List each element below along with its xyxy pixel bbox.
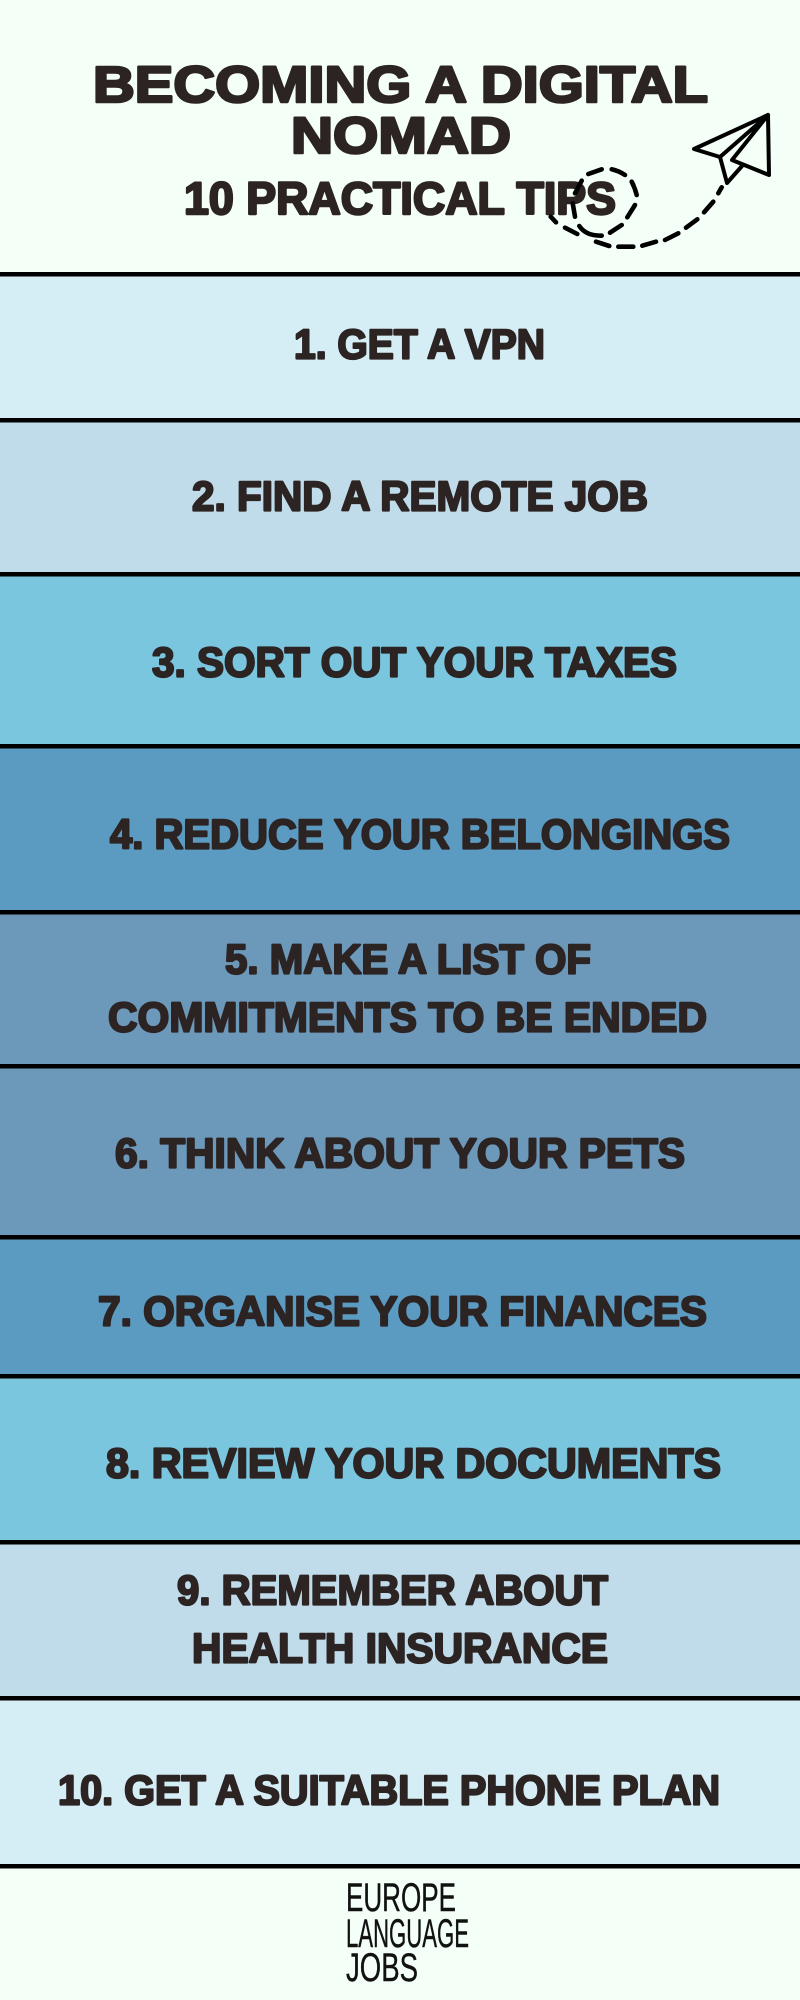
icon: paper plane (694, 115, 769, 183)
tip 5 text: COMMITMENTS TO BE ENDED (108, 994, 707, 1040)
panel: tip 10 (0, 1698, 800, 1866)
title: BECOMING A DIGITAL (93, 56, 708, 113)
subtitle: 10 PRACTICAL TIPS (184, 173, 616, 224)
dashed flight path (551, 169, 722, 247)
logo: Europe Language Jobs: LANGUAGE (346, 1912, 469, 1956)
panel: header (93, 56, 769, 247)
panel: tip 2 (0, 420, 800, 574)
tip 7 text: 7. ORGANISE YOUR FINANCES (98, 1288, 707, 1334)
logo: Europe Language Jobs: JOBS (346, 1946, 418, 1990)
tip 3 text: 3. SORT OUT YOUR TAXES (152, 638, 677, 686)
logo: Europe Language Jobs: EUROPE (346, 1876, 456, 1920)
panel: tip 3 (0, 574, 800, 746)
tip 4 text: 4. REDUCE YOUR BELONGINGS (110, 810, 730, 858)
panel: tip 4 (0, 746, 800, 912)
panel: tip 6 (0, 1066, 800, 1237)
panel: tip 1 (0, 274, 800, 420)
tip 2 text: 2. FIND A REMOTE JOB (192, 472, 648, 520)
tip 9 text (177, 1566, 608, 1672)
title (93, 56, 708, 164)
tip 5 text: 5. MAKE A LIST OF (225, 936, 591, 982)
tip 1 text: 1. GET A VPN (294, 320, 545, 368)
tip 6 text: 6. THINK ABOUT YOUR PETS (115, 1130, 685, 1176)
panel: tip 5 (0, 912, 800, 1066)
tip 10 text: 10. GET A SUITABLE PHONE PLAN (58, 1766, 720, 1814)
panel: tip 7 (0, 1237, 800, 1376)
tip 8 text: 8. REVIEW YOUR DOCUMENTS (106, 1440, 721, 1486)
tip 5 text (108, 936, 707, 1040)
logo: Europe Language Jobs (346, 1876, 469, 1990)
panel: tip 8 (0, 1376, 800, 1542)
title: NOMAD (291, 107, 511, 164)
tip 9 text: 9. REMEMBER ABOUT (177, 1566, 608, 1614)
tip 9 text: HEALTH INSURANCE (192, 1624, 608, 1672)
panel: tip 9 (0, 1542, 800, 1698)
